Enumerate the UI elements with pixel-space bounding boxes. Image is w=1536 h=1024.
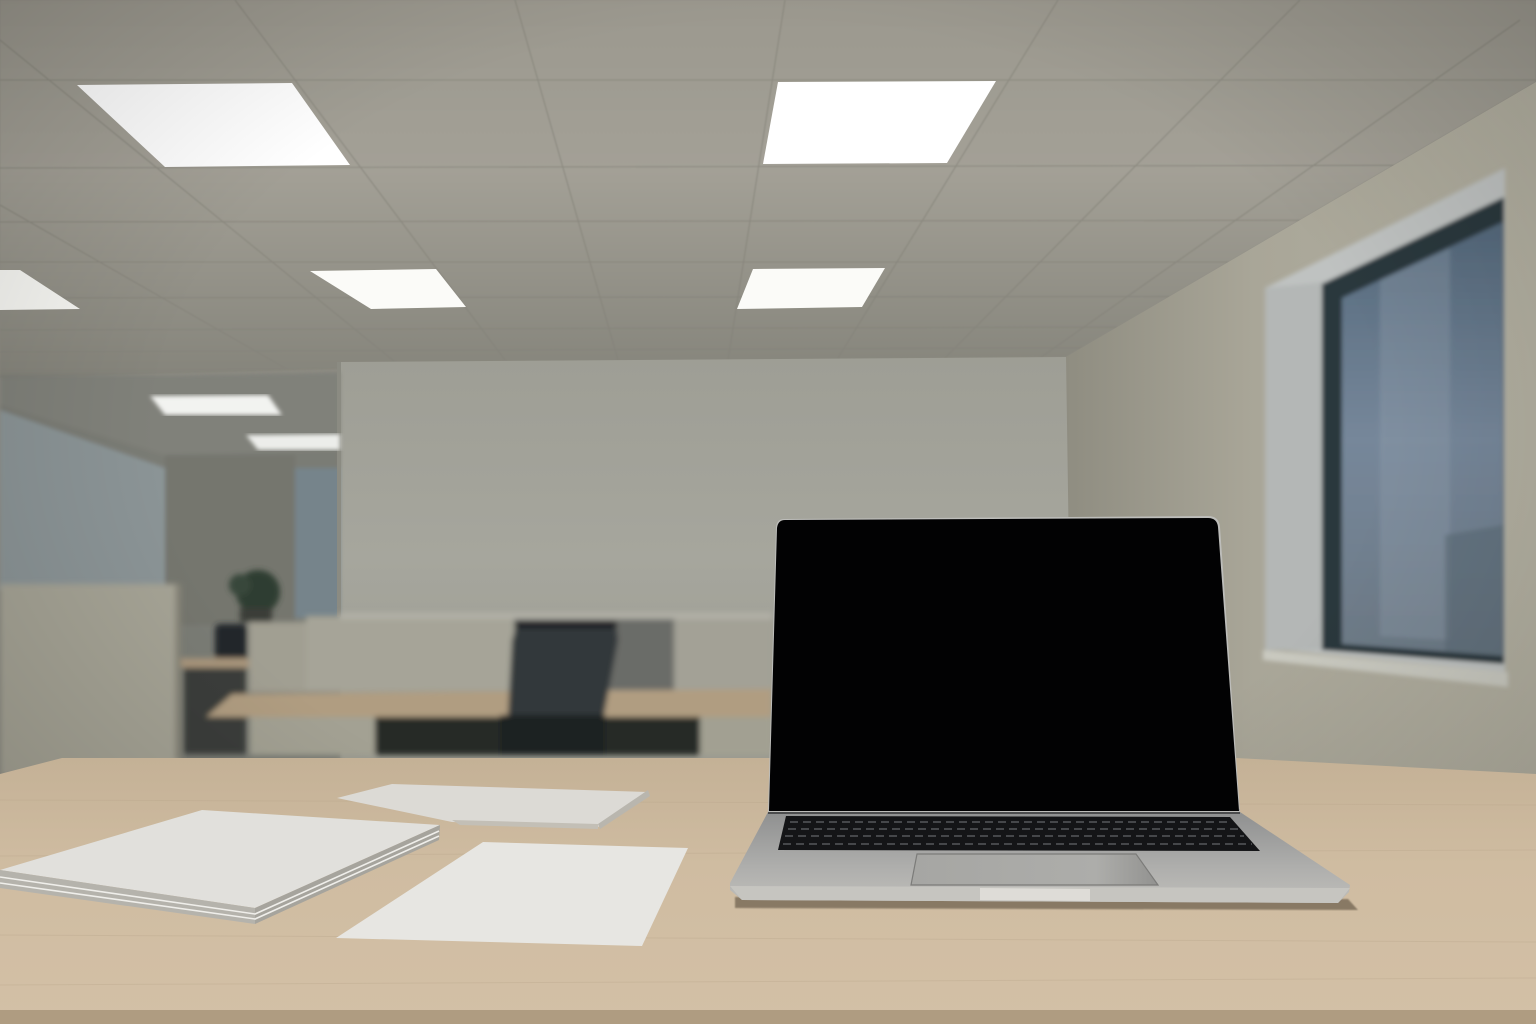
- screen: [769, 518, 1239, 811]
- ceiling light: distant one: [150, 395, 282, 415]
- laptop: [730, 516, 1358, 910]
- hinge: [768, 809, 1240, 814]
- table top: [0, 758, 1536, 1024]
- wall edge shadow: [337, 362, 341, 617]
- left cubicle partition: [0, 584, 180, 776]
- back wall: [340, 357, 1072, 760]
- background furniture: [0, 570, 774, 776]
- left corridor area: [0, 372, 340, 775]
- keyboard: [778, 816, 1260, 851]
- plant: [229, 570, 280, 622]
- right wall: [1066, 82, 1536, 778]
- ceiling light: distant two: [246, 434, 340, 450]
- paper sheet: front: [336, 842, 688, 946]
- window reveal: [1265, 282, 1325, 650]
- room background: [0, 0, 1536, 778]
- distant chair and desk: [181, 624, 251, 754]
- cubicle panels: [249, 613, 774, 692]
- window recess: [1265, 168, 1505, 672]
- ceiling light: middle centre: [737, 268, 885, 309]
- laptop shadow: [735, 897, 1358, 910]
- window glass: [1342, 222, 1503, 656]
- trackpad: [911, 854, 1158, 885]
- curtain haze: [1380, 248, 1450, 640]
- folder: left: [0, 810, 440, 924]
- paper stack: back: [337, 784, 650, 829]
- laptop base: [730, 812, 1350, 903]
- window frame: [1322, 197, 1504, 664]
- ceiling light: middle left: [310, 269, 466, 309]
- window: [1263, 168, 1508, 687]
- ceiling: [0, 0, 1536, 378]
- office chair: [500, 621, 618, 755]
- middle desk: [206, 689, 772, 755]
- ceiling light: front left: [77, 83, 350, 167]
- screen lid: [768, 516, 1240, 812]
- distant building: [1445, 525, 1503, 656]
- ceiling light: far left edge: [0, 270, 80, 310]
- front edge: [730, 886, 1350, 903]
- ceiling light: front centre: [763, 81, 996, 164]
- window sill: [1263, 650, 1508, 687]
